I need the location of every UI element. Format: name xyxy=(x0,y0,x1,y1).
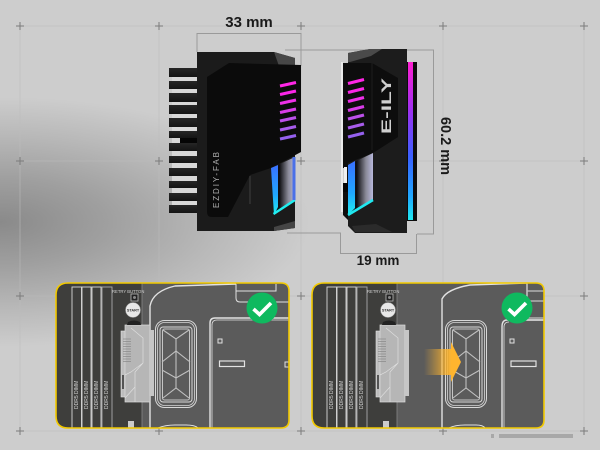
connector pins xyxy=(169,68,197,213)
plate outlines xyxy=(442,283,544,428)
rainbow strip xyxy=(403,62,417,221)
panel: insertion view xyxy=(312,283,544,432)
connector installed xyxy=(121,320,150,402)
panel: installed view xyxy=(56,283,290,432)
plate outlines xyxy=(150,284,290,428)
label: 33 mm: 33 mm xyxy=(225,14,273,31)
light window xyxy=(271,157,295,215)
rear panel xyxy=(343,63,398,220)
brand text: EZDIY-FAB xyxy=(212,152,221,208)
heatsink xyxy=(446,320,486,408)
heatsink xyxy=(156,320,196,408)
light window xyxy=(348,153,373,215)
dimension lines xyxy=(197,34,434,254)
label: 19 mm: 19 mm xyxy=(357,253,399,268)
label: 60.2 mm: 60.2 mm xyxy=(437,117,453,175)
front panel xyxy=(207,63,301,217)
LED bars xyxy=(348,80,364,137)
icon: check badge xyxy=(502,292,532,324)
connector: rear view xyxy=(342,49,417,233)
icon: check badge xyxy=(246,292,278,324)
connector unplugged xyxy=(376,320,405,402)
connector body xyxy=(197,52,295,231)
rear body xyxy=(348,49,407,233)
white edge xyxy=(341,62,343,212)
logo text: E-ILY xyxy=(378,77,394,134)
arrow xyxy=(424,342,461,382)
LED bars xyxy=(280,82,296,139)
connector: side view xyxy=(169,52,301,231)
scroll indicator xyxy=(491,434,573,438)
